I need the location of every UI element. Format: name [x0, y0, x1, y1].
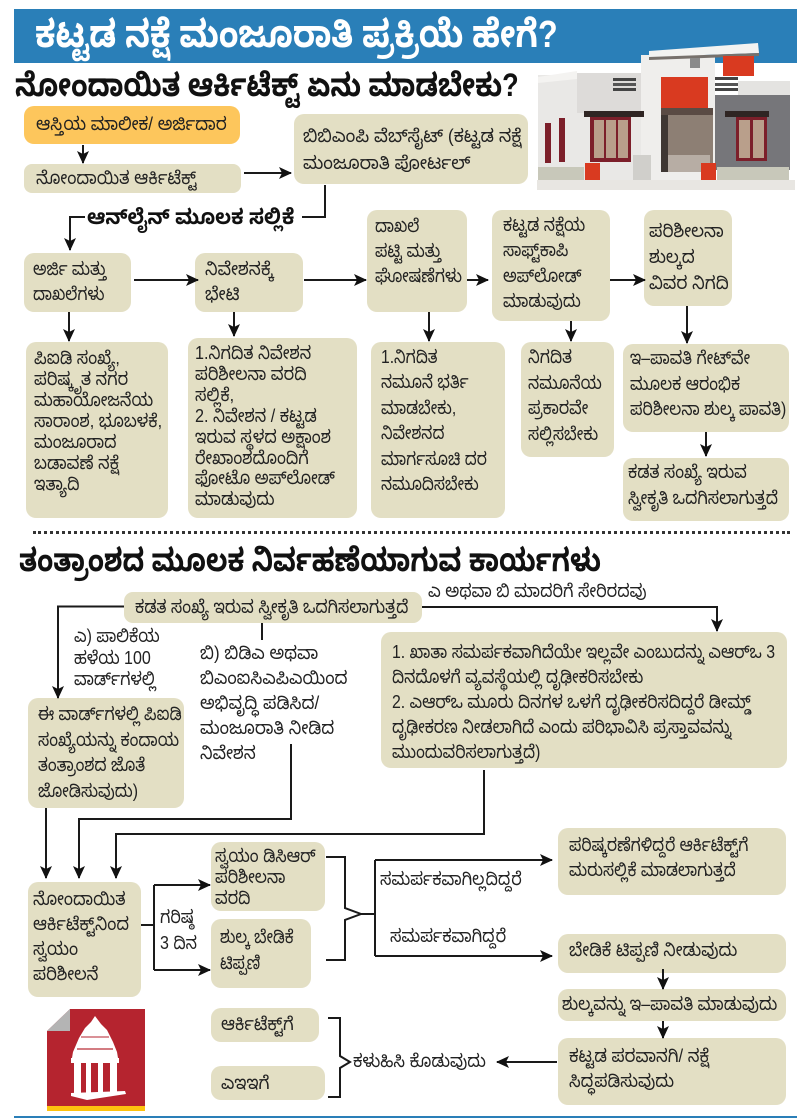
- title banner: [14, 9, 797, 63]
- box: upload building plan softcopy: ಸಾಫ್ಟ್‌ಕಾಪಿ: [503, 240, 568, 260]
- box: PID number details: ಪರಿಷ್ಕೃತ ನಗರ: [34, 369, 128, 389]
- label: if proper: ಸಮರ್ಪಕವಾಗಿದ್ದರೆ: [390, 926, 506, 946]
- box: PID number details: ಮಹಾಯೋಜನೆಯ: [34, 390, 153, 410]
- box: self verification by architect: ಪರಿಶೀಲನೆ: [33, 964, 98, 984]
- label: if not proper: ಸಮರ್ಪಕವಾಗಿಲ್ಲದಿದ್ದರೆ: [380, 869, 522, 889]
- box: file number acknowledgement: ಸ್ವೀಕೃತಿ ಒದಗಿಸಲಾಗುತ್ತದೆ: [628, 488, 778, 508]
- box: link PID with revenue software: [28, 698, 184, 808]
- box: inspection fee details: ಪರಿಶೀಲನಾ: [649, 221, 724, 241]
- text: option A old wards: [74, 626, 160, 692]
- box: PID number details: ಸಾರಾಂಶ, ಭೂಬಳಕೆ,: [34, 411, 162, 431]
- box: to AEE: [211, 1066, 325, 1100]
- box: inspection fee details: [644, 210, 732, 306]
- box: to architect: ಆರ್ಕಿಟೆಕ್ಟ್‌ಗೆ: [221, 1014, 294, 1034]
- box: fill prescribed form: ನಿವೇಶನದ: [381, 423, 444, 443]
- label: not type A or B: ಎ ಅಥವಾ ಬಿ ಮಾದರಿಗೆ ಸೇರಿರದವು: [428, 581, 647, 601]
- box: site inspection report: ಇರುವ ಸ್ಥಳದ ಅಕ್ಷಾಂಶ: [195, 427, 331, 447]
- box: e-payment gateway: ಇ–ಪಾವತಿ ಗೇಟ್‌ವೇ: [630, 348, 750, 368]
- text: option A old wards: ವಾರ್ಡ್‌ಗಳಲ್ಲಿ: [74, 669, 156, 689]
- box: prepare building licence: [558, 1038, 786, 1105]
- box: khata verification by ARO: 2. ಎಆರ್‌ಒ ಮೂರು ದಿನಗಳ ಒಳಗೆ ದೃಢೀಕರಿಸದಿದ್ದರೆ ಡೀಮ್ಡ್: [392, 692, 751, 712]
- box: fill prescribed form: ಮಾರ್ಗಸೂಚಿ ದರ: [381, 449, 487, 469]
- box: e-payment gateway: ಮೂಲಕ ಆರಂಭಿಕ: [630, 374, 740, 394]
- box: site visit: ಭೇಟಿ: [205, 284, 239, 304]
- box: site inspection report: 1.ನಿಗದಿತ ನಿವೇಶನ: [195, 343, 311, 363]
- text: option B BDA: ಅಭಿವೃದ್ಧಿ ಪಡಿಸಿದ/: [200, 693, 319, 713]
- text: option A old wards: ಹಳೆಯ 100: [74, 648, 151, 668]
- box: fill prescribed form: 1.ನಿಗದಿತ: [381, 347, 438, 367]
- box: self verification by architect: ನೋಂದಾಯಿತ: [33, 889, 126, 909]
- box: site inspection report: ಫೋಟೊ ಅಪ್‌ಲೋಡ್: [195, 468, 335, 488]
- text: option B BDA: ಬಿಎಂಐಸಿಎಪಿಎಯಿಂದ: [200, 668, 348, 688]
- box: site inspection report: 2. ನಿವೇಶನ / ಕಟ್ಟಡ: [195, 406, 317, 426]
- box: fill prescribed form: ನಮೂದಿಸಬೇಕು: [381, 474, 479, 494]
- label: maximum 3 days: [160, 907, 197, 953]
- text: option B BDA: ನಿವೇಶನ: [200, 743, 256, 763]
- box: khata verification by ARO: [381, 632, 787, 768]
- box: PID number details: ಪಿಐಡಿ ಸಂಖ್ಯೆ,: [34, 348, 120, 368]
- box: resubmission to architect: ಮರುಸಲ್ಲಿಕೆ ಮಾಡಲಾಗುತ್ತದೆ: [569, 860, 736, 880]
- box: upload building plan softcopy: ಮಾಡುವುದು: [503, 291, 581, 311]
- box: resubmission to architect: ಪರಿಷ್ಕರಣೆಗಳಿದ್ದರೆ ಆರ್ಕಿಟೆಕ್ಟ್‌ಗೆ: [569, 835, 748, 855]
- box: file number acknowledgement: [623, 458, 789, 521]
- box: document list and declarations: ಘೋಷಣೆಗಳು: [375, 266, 462, 286]
- box: submit in prescribed format: [521, 342, 614, 457]
- box: prepare building licence: ಕಟ್ಟಡ ಪರವಾನಗಿ/ ನಕ್ಷೆ: [569, 1046, 709, 1066]
- icon: BBMP logo: [47, 1009, 145, 1111]
- box: e-pay the fee: [558, 989, 786, 1021]
- label: online submission: ಆನ್‌ಲೈನ್ ಮೂಲಕ ಸಲ್ಲಿಕೆ: [87, 206, 294, 229]
- box: khata verification by ARO: 1. ಖಾತಾ ಸಮರ್ಪಕವಾಗಿದೆಯೇ ಇಲ್ಲವೇ ಎಂಬುದನ್ನು ಎಆರ್‌ಒ 3: [392, 642, 775, 662]
- box: site inspection report: ಸಲ್ಲಿಕೆ,: [195, 385, 234, 405]
- box: PID number details: [26, 342, 168, 518]
- box: site inspection report: ರೇಖಾಂಶದೊಂದಿಗೆ: [195, 448, 309, 468]
- title banner: ಕಟ್ಟಡ ನಕ್ಷೆ ಮಂಜೂರಾತಿ ಪ್ರಕ್ರಿಯೆ ಹೇಗೆ?: [35, 14, 558, 56]
- box: PID number details: ಮಂಜೂರಾದ: [34, 432, 116, 452]
- text: option B BDA: [200, 643, 348, 763]
- box: khata verification by ARO: ದೃಢೀಕರಣ ನೀಡಲಾಗಿದೆ ಎಂದು ಪರಿಭಾವಿಸಿ ಪ್ರಸ್ತಾವವನ್ನು: [392, 717, 731, 737]
- box: e-payment gateway: ಪರಿಶೀಲನಾ ಶುಲ್ಕ ಪಾವತಿ): [630, 399, 786, 419]
- box: fee demand note: [211, 919, 311, 988]
- heading: tasks via software: ತಂತ್ರಾಂಶದ ಮೂಲಕ ನಿರ್ವಹಣೆಯಾಗುವ ಕಾರ್ಯಗಳು: [19, 542, 601, 578]
- label: maximum 3 days: ಗರಿಷ್ಠ: [160, 907, 194, 927]
- box: PID number details: ಇತ್ಯಾದಿ: [34, 474, 79, 494]
- box: upload building plan softcopy: ಕಟ್ಟಡ ನಕ್ಷೆಯ: [503, 215, 585, 235]
- box: to AEE: ಎಇಇಗೆ: [221, 1073, 270, 1093]
- box: site visit: [195, 253, 303, 312]
- box: issue demand note: ಬೇಡಿಕೆ ಟಿಪ್ಪಣಿ ನೀಡುವುದು: [569, 940, 737, 960]
- box: e-payment gateway: [623, 344, 789, 432]
- text: option B BDA: ಮಂಜೂರಾತಿ ನೀಡಿದ: [200, 718, 334, 738]
- box: self DCR report: ಸ್ವಯಂ ಡಿಸಿಆರ್: [215, 846, 316, 866]
- box: link PID with revenue software: ತಂತ್ರಾಂಶದ ಜೊತೆ: [38, 755, 145, 775]
- text: option A old wards: ಎ) ಪಾಲಿಕೆಯ: [74, 626, 160, 646]
- box: self verification by architect: ಆರ್ಕಿಟೆಕ್ಟ್‌ನಿಂದ: [33, 914, 129, 934]
- box: fee demand note: ಶುಲ್ಕ ಬೇಡಿಕೆ: [220, 927, 294, 947]
- label: maximum 3 days: 3 ದಿನ: [160, 933, 197, 953]
- box: document list and declarations: [367, 210, 467, 312]
- box: self DCR report: ವರದಿ: [215, 888, 250, 908]
- box: prepare building licence: ಸಿದ್ಧಪಡಿಸುವುದು: [569, 1071, 674, 1091]
- box: fill prescribed form: ಮಾಡಬೇಕು,: [381, 398, 456, 418]
- box: site inspection report: [188, 338, 357, 518]
- box: self DCR report: [211, 842, 325, 911]
- box: issue demand note: [558, 934, 786, 973]
- box: submit in prescribed format: ನಮೂನೆಯ: [528, 373, 602, 393]
- box: e-pay the fee: ಶುಲ್ಕವನ್ನು ಇ–ಪಾವತಿ ಮಾಡುವುದು: [562, 994, 777, 1014]
- text: option B BDA: ಬಿ) ಬಿಡಿಎ ಅಥವಾ: [200, 643, 318, 663]
- box: link PID with revenue software: ಜೋಡಿಸುವುದು): [38, 781, 138, 801]
- box: self DCR report: ಪರಿಶೀಲನಾ: [215, 867, 285, 887]
- box: inspection fee details: ವಿವರ ನಿಗದಿ: [649, 273, 729, 293]
- box: khata verification by ARO: ಮುಂದುವರಿಸಲಾಗುತ್ತದೆ): [392, 742, 540, 762]
- box: document list and declarations: ಪಟ್ಟಿ ಮತ್ತು: [375, 241, 441, 261]
- box: upload building plan softcopy: [492, 210, 610, 321]
- box: resubmission to architect: [558, 828, 786, 895]
- box: file number acknowledgement: ಕಡತ ಸಂಖ್ಯೆ ಇರುವ: [628, 462, 747, 482]
- box: site inspection report: ಮಾಡುವುದು: [195, 489, 275, 509]
- box: application and documents: ಅರ್ಜಿ ಮತ್ತು: [33, 259, 106, 279]
- box: to architect: [211, 1008, 319, 1042]
- box: BBMP website: ಮಂಜೂರಾತಿ ಪೋರ್ಟಲ್: [303, 153, 470, 173]
- box: registered architect: [24, 164, 241, 193]
- box: BBMP website: [294, 114, 528, 184]
- box: application and documents: [24, 253, 131, 312]
- bottom rule: [14, 1116, 797, 1118]
- box: file number wide: ಕಡತ ಸಂಖ್ಯೆ ಇರುವ ಸ್ವೀಕೃತಿ ಒದಗಿಸಲಾಗುತ್ತದೆ: [135, 597, 408, 617]
- box: property owner: ಆಸ್ತಿಯ ಮಾಲೀಕ/ ಅರ್ಜಿದಾರ: [36, 114, 227, 134]
- box: fee demand note: ಟಿಪ್ಪಣಿ: [220, 953, 260, 973]
- box: fill prescribed form: [371, 342, 505, 518]
- box: application and documents: ದಾಖಲೆಗಳು: [33, 284, 104, 304]
- box: link PID with revenue software: ಸಂಖ್ಯೆಯನ್ನು ಕಂದಾಯ: [38, 730, 179, 750]
- box: document list and declarations: ದಾಖಲೆ: [375, 216, 419, 236]
- box: BBMP website: ಬಿಬಿಎಂಪಿ ವೆಬ್‌ಸೈಟ್ (ಕಟ್ಟಡ ನಕ್ಷೆ: [303, 126, 521, 146]
- illustration: house: [537, 43, 795, 190]
- box: fill prescribed form: ನಮೂನೆ ಭರ್ತಿ: [381, 372, 469, 392]
- box: upload building plan softcopy: ಅಪ್‌ಲೋಡ್: [503, 266, 582, 286]
- label: send: ಕಳುಹಿಸಿ ಕೊಡುವುದು: [353, 1051, 486, 1071]
- box: property owner: [24, 106, 240, 144]
- box: submit in prescribed format: ಸಲ್ಲಿಸಬೇಕು: [528, 424, 598, 444]
- box: registered architect: ನೋಂದಾಯಿತ ಆರ್ಕಿಟೆಕ್ಟ್: [36, 168, 197, 188]
- box: link PID with revenue software: ಈ ವಾರ್ಡ್‌ಗಳಲ್ಲಿ ಪಿಐಡಿ: [38, 704, 182, 724]
- box: submit in prescribed format: ನಿಗದಿತ: [528, 347, 572, 367]
- box: inspection fee details: ಶುಲ್ಕದ: [649, 247, 695, 267]
- box: PID number details: ಬಡಾವಣೆ ನಕ್ಷೆ: [34, 453, 119, 473]
- box: file number wide: [124, 592, 422, 623]
- box: self verification by architect: ಸ್ವಯಂ: [33, 939, 78, 959]
- box: submit in prescribed format: ಪ್ರಕಾರವೇ: [528, 398, 588, 418]
- box: self verification by architect: [28, 882, 141, 997]
- box: site visit: ನಿವೇಶನಕ್ಕೆ: [205, 259, 274, 279]
- heading: registered architect: ನೋಂದಾಯಿತ ಆರ್ಕಿಟೆಕ್ಟ್ ಏನು ಮಾಡಬೇಕು?: [15, 67, 519, 103]
- box: khata verification by ARO: ದಿನದೊಳಗೆ ವ್ಯವಸ್ಥೆಯಲ್ಲಿ ದೃಢೀಕರಿಸಬೇಕು: [392, 667, 643, 687]
- box: site inspection report: ಪರಿಶೀಲನಾ ವರದಿ: [195, 364, 307, 384]
